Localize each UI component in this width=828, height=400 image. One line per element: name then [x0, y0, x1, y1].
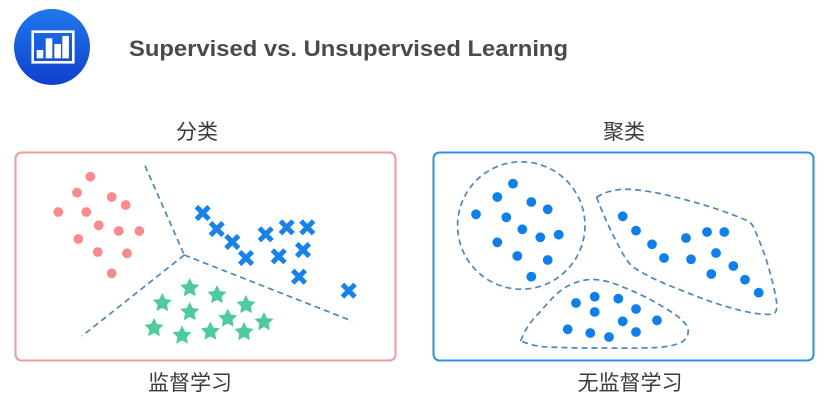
- class: green stars: [144, 278, 274, 344]
- cluster points: bottom: [563, 292, 662, 342]
- cluster points: circle: [471, 179, 564, 282]
- decision boundaries: [82, 166, 352, 336]
- panel border: [16, 152, 396, 360]
- class: red dots: [53, 172, 144, 278]
- heading: classification: 分类: [176, 121, 218, 144]
- class: blue crosses: [196, 207, 355, 297]
- cluster outline: bottom: [521, 279, 688, 348]
- heading: clustering: 聚类: [603, 121, 645, 144]
- panel: clustering: [434, 152, 814, 360]
- cluster outline: upper right: [597, 189, 777, 314]
- cluster outline: circle: [458, 162, 585, 289]
- icon: bar chart badge: [14, 9, 90, 85]
- panel border: [434, 152, 814, 360]
- panel: classification: [16, 152, 396, 360]
- cluster points: upper right: [618, 211, 764, 298]
- caption: supervised learning: 监督学习: [148, 372, 232, 395]
- caption: unsupervised learning: 无监督学习: [578, 372, 682, 395]
- title: Supervised vs. Unsupervised Learning: [129, 36, 568, 61]
